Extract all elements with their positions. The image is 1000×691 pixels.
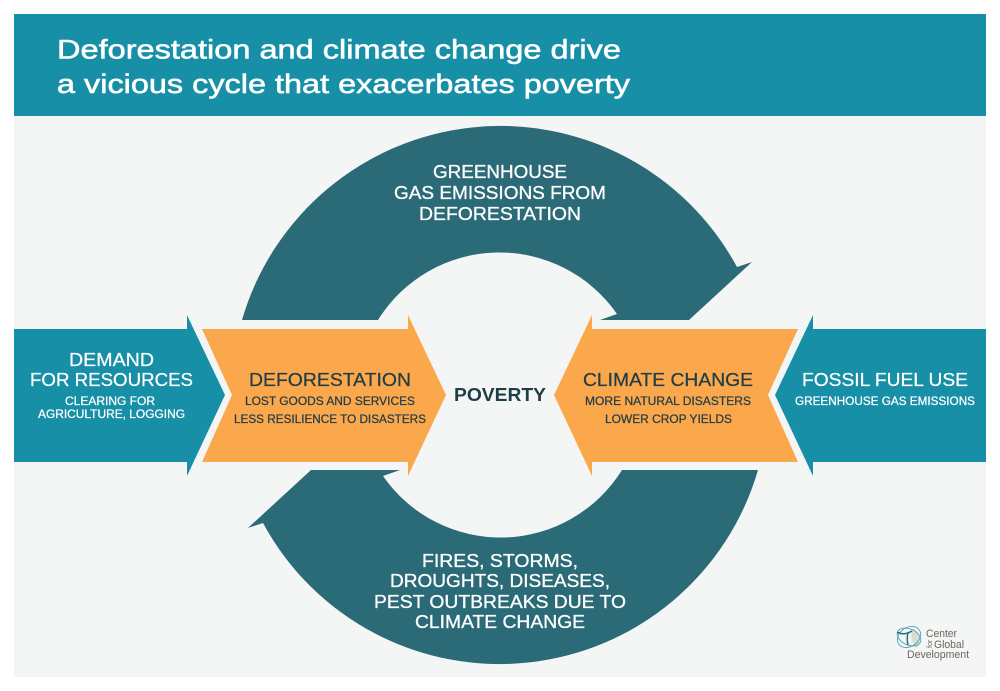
fossil fuel text: FOSSIL FUEL USE [802,369,968,390]
arrow: deforestation [202,315,446,476]
top arrow label: DEFORESTATION [419,203,581,224]
bottom arrow label [374,550,626,632]
deforestation text: LESS RESILIENCE TO DISASTERS [234,414,426,426]
demand text: CLEARING FOR [65,396,155,408]
top arrow label: GREENHOUSE [433,161,567,182]
demand text [30,349,193,421]
top curved arrow [242,126,752,320]
arrow: demand for resources [14,315,225,476]
title: a vicious cycle that exacerbates poverty [57,69,631,99]
header banner [14,14,986,116]
bottom arrow label: PEST OUTBREAKS DUE TO [374,591,626,612]
fossil fuel text [795,369,975,408]
demand text: DEMAND [69,349,154,370]
bottom arrow label: DROUGHTS, DISEASES, [390,570,610,591]
bottom arrow label: FIRES, STORMS, [422,550,578,571]
fossil fuel text: GREENHOUSE GAS EMISSIONS [795,396,975,408]
demand text: FOR RESOURCES [30,369,193,390]
bottom curved arrow [248,470,758,664]
climate change text: MORE NATURAL DISASTERS [585,396,751,408]
top arrow label [394,161,606,224]
icon: globe [893,622,925,652]
bottom arrow label: CLIMATE CHANGE [415,611,585,632]
climate change text [583,369,753,426]
deforestation text: LOST GOODS AND SERVICES [245,396,415,408]
top arrow label: GAS EMISSIONS FROM [394,182,606,203]
logo wordmark: Global [934,639,964,651]
logo wordmark: Development [907,649,969,661]
arrow: climate change [554,315,798,476]
logo wordmark: for [927,639,934,648]
logo wordmark [907,628,969,661]
climate change text: LOWER CROP YIELDS [605,414,732,426]
logo wordmark: Center [926,628,957,640]
title [57,34,631,99]
climate change text: CLIMATE CHANGE [583,369,753,390]
arrow: fossil fuel use [775,315,986,476]
deforestation text: DEFORESTATION [249,369,411,390]
logo: Center for Global Development [893,622,969,661]
deforestation text [234,369,426,426]
demand text: AGRICULTURE, LOGGING [38,409,185,421]
poverty label: POVERTY [454,385,546,405]
title: Deforestation and climate change drive [57,34,621,64]
